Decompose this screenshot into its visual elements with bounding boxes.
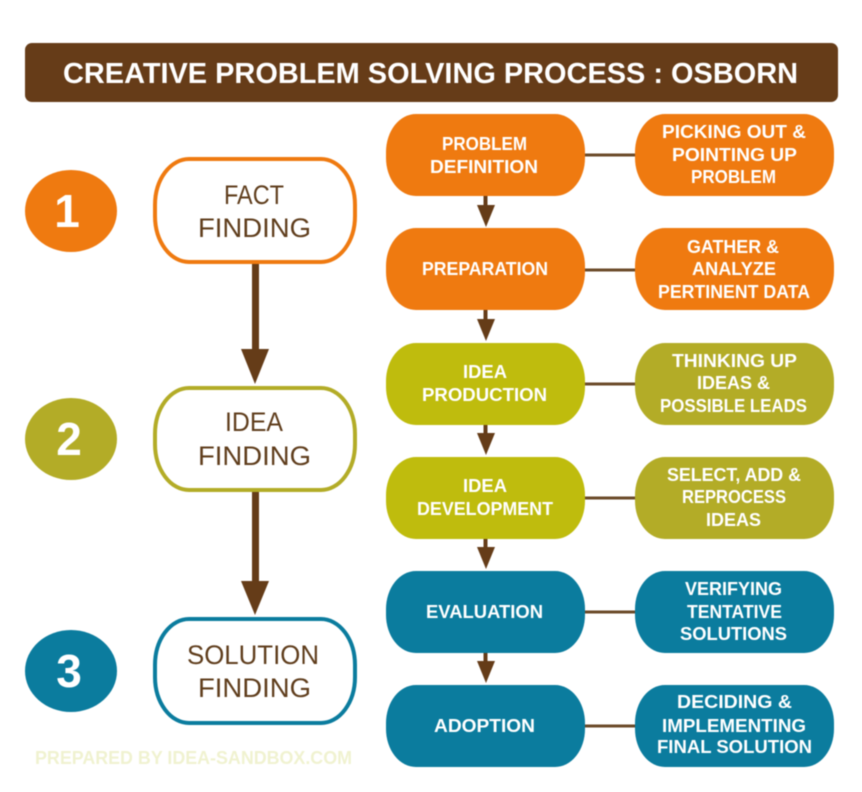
- stage: idea finding: IDEA: [225, 407, 283, 437]
- number 3: [25, 630, 117, 712]
- step: idea development: IDEA: [463, 476, 507, 496]
- detail: verifying: TENTATIVE: [687, 602, 782, 622]
- detail: gather: PERTINENT DATA: [658, 282, 810, 302]
- arrow: idea to solution: [241, 490, 269, 615]
- detail: deciding: [635, 685, 834, 767]
- number 2: [25, 398, 117, 480]
- connectors between columns: [584, 155, 636, 726]
- stage: fact finding: [155, 159, 355, 262]
- step: evaluation: [386, 571, 585, 653]
- detail: select: REPROCESS: [682, 487, 786, 507]
- step: evaluation: EVALUATION: [426, 602, 543, 622]
- stage: solution finding: SOLUTION: [187, 640, 319, 670]
- detail: thinking up: THINKING UP: [672, 351, 797, 371]
- title banner: CREATIVE PROBLEM SOLVING PROCESS : OSBORN: [63, 58, 798, 90]
- stage: solution finding: FINDING: [198, 673, 311, 703]
- number 3: 3: [56, 645, 82, 697]
- number 1: [25, 170, 117, 252]
- stage: fact finding: FINDING: [198, 213, 311, 243]
- detail: thinking up: POSSIBLE LEADS: [660, 396, 807, 416]
- number 2: 2: [56, 413, 82, 465]
- detail: picking out: POINTING UP: [672, 145, 797, 165]
- step: adoption: ADOPTION: [434, 716, 535, 736]
- detail: select: [635, 457, 834, 539]
- step: idea production: [386, 343, 585, 425]
- stage: fact finding: FACT: [224, 180, 284, 210]
- detail: gather: ANALYZE: [692, 259, 776, 279]
- detail: deciding: IMPLEMENTING: [662, 716, 806, 736]
- detail: thinking up: IDEAS &: [697, 373, 770, 393]
- step: problem definition: PROBLEM: [442, 134, 527, 154]
- step: problem definition: DEFINITION: [430, 157, 538, 177]
- step: problem definition: [386, 114, 585, 196]
- detail: picking out: PICKING OUT &: [662, 122, 806, 142]
- step: idea development: [386, 457, 585, 539]
- step: preparation: PREPARATION: [422, 259, 548, 279]
- detail: verifying: SOLUTIONS: [680, 624, 787, 644]
- detail: deciding: FINAL SOLUTION: [657, 737, 812, 757]
- step: idea development: DEVELOPMENT: [417, 499, 553, 519]
- detail: deciding: DECIDING &: [677, 692, 792, 712]
- arrow: fact to idea: [241, 262, 269, 384]
- step: adoption: [386, 685, 585, 767]
- detail: gather: [635, 228, 834, 310]
- detail: picking out: [635, 114, 834, 196]
- step arrows: [477, 195, 495, 683]
- title banner: [25, 43, 838, 102]
- stage: solution finding: [155, 619, 355, 723]
- step: idea production: PRODUCTION: [422, 385, 547, 405]
- credit line: PREPARED BY IDEA-SANDBOX.COM: [35, 748, 352, 768]
- stage: idea finding: [155, 388, 355, 490]
- detail: verifying: [635, 571, 834, 653]
- detail: select: IDEAS: [706, 510, 761, 530]
- detail: verifying: VERIFYING: [685, 579, 782, 599]
- detail: select: SELECT, ADD &: [667, 465, 801, 485]
- detail: gather: GATHER &: [687, 237, 779, 257]
- detail: picking out: PROBLEM: [691, 167, 776, 187]
- step: preparation: [386, 228, 585, 310]
- step: idea production: IDEA: [463, 362, 507, 382]
- detail: thinking up: [635, 343, 834, 425]
- stage: idea finding: FINDING: [198, 441, 311, 471]
- number 1: 1: [54, 185, 80, 237]
